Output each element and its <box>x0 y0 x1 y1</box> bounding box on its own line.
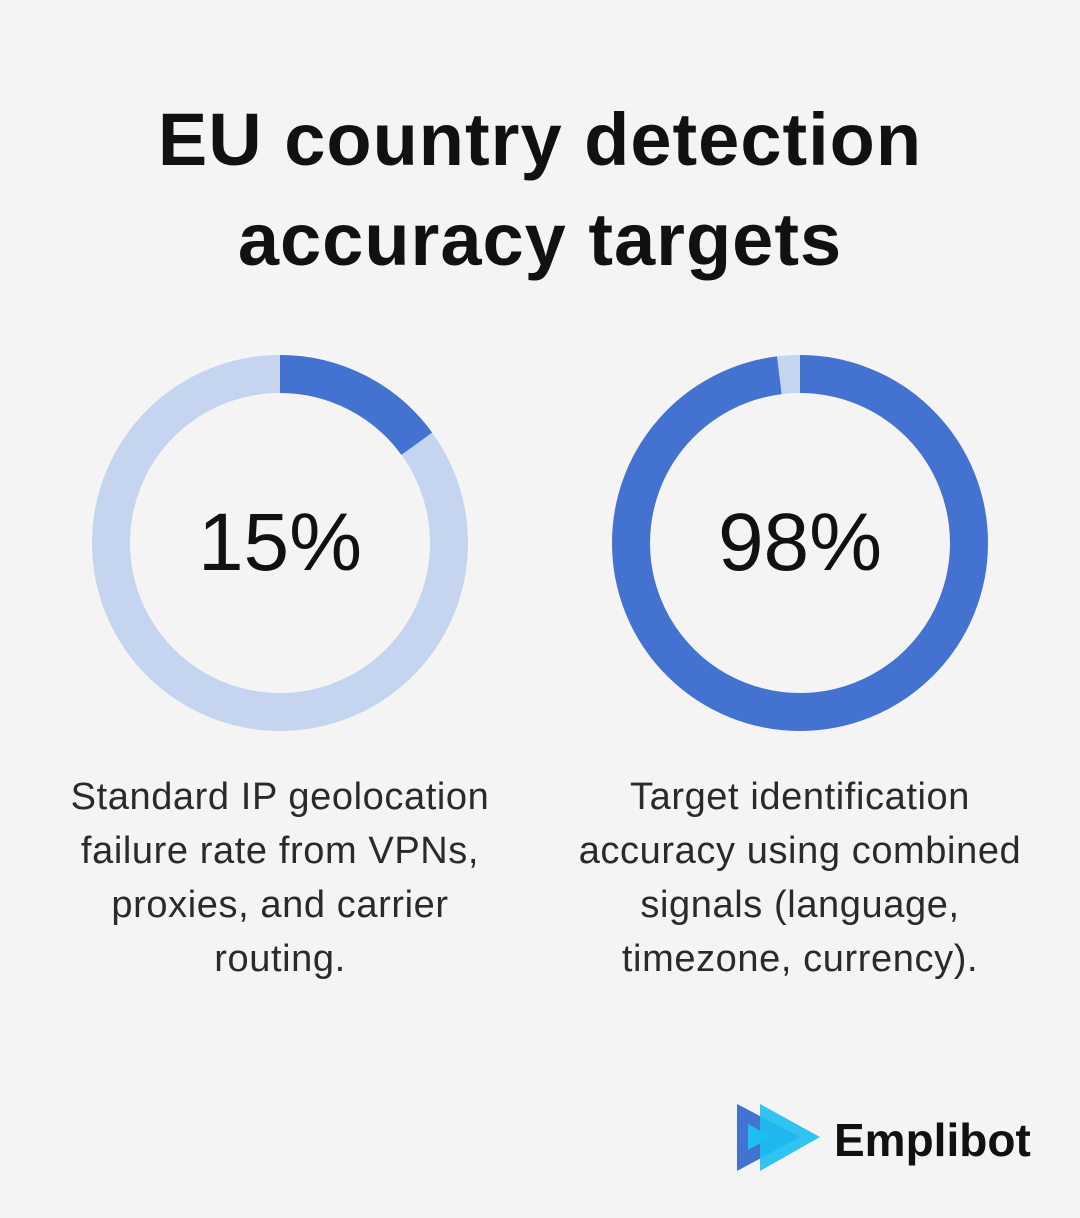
title: EU country detection <box>158 98 922 181</box>
donut: 98% <box>631 374 969 712</box>
description left: routing. <box>214 938 346 980</box>
donut: 15% <box>111 374 449 712</box>
donut: 98%: 98% <box>718 497 882 588</box>
title: accuracy targets <box>238 198 842 281</box>
logo: Emplibot <box>834 1114 1031 1166</box>
description left <box>71 776 489 980</box>
description left: Standard IP geolocation <box>71 776 489 818</box>
title <box>158 98 922 281</box>
description right <box>579 776 1021 980</box>
description right: signals (language, <box>640 884 960 926</box>
logo <box>737 1104 1031 1171</box>
description right: accuracy using combined <box>579 830 1021 872</box>
description left: failure rate from VPNs, <box>81 830 479 872</box>
description right: timezone, currency). <box>622 938 978 980</box>
description left: proxies, and carrier <box>111 884 449 926</box>
description right: Target identification <box>630 776 970 818</box>
donut: 15%: 15% <box>198 497 362 588</box>
